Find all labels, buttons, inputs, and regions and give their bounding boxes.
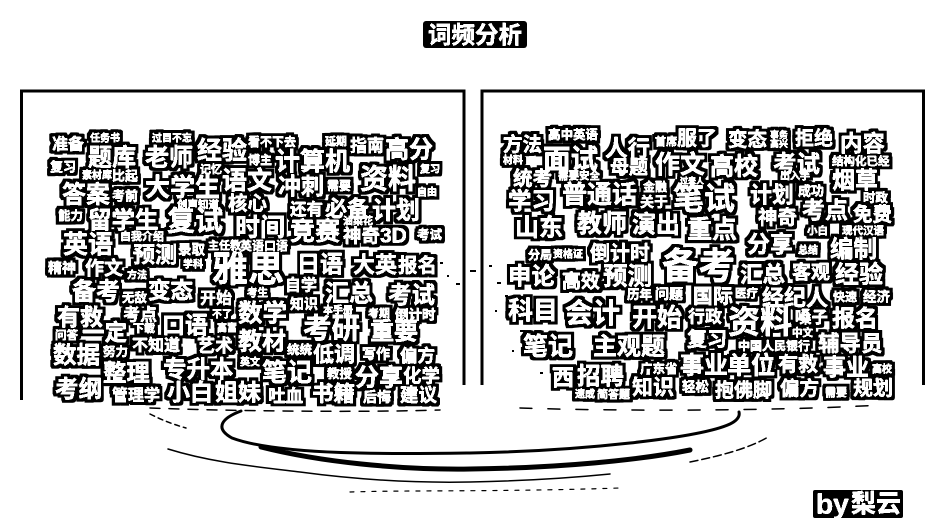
- word cloud: right panel: 资格证: [553, 248, 583, 260]
- word cloud: right panel: 抱佛脚: [715, 380, 772, 402]
- word cloud: left panel: 无敌: [122, 290, 148, 305]
- word cloud: left panel: 本手册: [323, 304, 353, 316]
- word cloud: left panel: 下载: [133, 321, 155, 335]
- word cloud: left panel: 冲刺: [278, 173, 324, 199]
- word cloud: right panel: 学习: [508, 188, 555, 214]
- word cloud: right panel: 小白: [807, 224, 828, 237]
- word cloud: left panel: 语文: [222, 167, 272, 195]
- word cloud: left panel: 看不下去: [248, 134, 296, 149]
- word cloud: right panel: 关于: [640, 194, 668, 210]
- word cloud: right panel: 招聘: [577, 363, 624, 389]
- word cloud: left panel: 数学: [238, 300, 287, 328]
- word cloud: left panel: 吐血: [268, 386, 303, 406]
- word cloud: left panel: 主任教: [208, 238, 241, 252]
- word cloud: left panel: 自由: [417, 186, 437, 198]
- word cloud: right panel: 客观: [792, 260, 830, 284]
- word cloud: left panel: 留学生: [88, 207, 158, 233]
- word cloud: left panel: 英语: [63, 231, 113, 259]
- word cloud: right panel: 预测: [603, 262, 652, 290]
- word cloud: left panel: 计划: [372, 198, 420, 224]
- word cloud: right panel: 重点: [687, 216, 737, 244]
- word cloud: left panel: 作文: [85, 256, 123, 280]
- word cloud: right panel: 医疗: [735, 286, 758, 300]
- word cloud: right panel: 历年: [627, 287, 652, 302]
- word cloud: left panel: 自学: [285, 276, 317, 294]
- word cloud: right panel: 母题: [610, 158, 648, 178]
- word cloud: right panel: 高兴: [770, 138, 788, 149]
- word cloud: right panel: 简答题: [597, 387, 630, 401]
- word cloud: left panel: 自我介绍: [120, 229, 164, 243]
- word cloud: right panel: 资料: [728, 304, 792, 340]
- word cloud: left panel: 知识: [290, 296, 318, 312]
- word cloud: right panel: 人行: [605, 136, 650, 162]
- word cloud: right panel: 申论: [508, 263, 556, 289]
- word cloud: right panel: 演出: [632, 212, 680, 238]
- word cloud: left panel: 有救: [57, 304, 103, 330]
- word cloud: right panel: 知识: [632, 376, 674, 400]
- word cloud: left panel: 艺术: [197, 336, 233, 356]
- word cloud: right panel: 编制: [830, 236, 877, 262]
- word cloud: right panel: 科目: [508, 297, 558, 325]
- word cloud: left panel: 专升本: [163, 356, 234, 382]
- word cloud: left panel: 努力: [103, 344, 128, 359]
- word cloud: right panel: 出入手: [780, 170, 810, 182]
- word cloud: left panel: 整理: [103, 360, 150, 386]
- word cloud: right panel: 时政: [863, 190, 889, 205]
- word cloud: right panel: 汇总: [740, 262, 785, 288]
- word cloud: left panel: 考试: [388, 282, 435, 308]
- word cloud: left panel: 问答: [55, 328, 78, 342]
- word cloud: right panel: 考试: [773, 151, 820, 177]
- word cloud: right panel: 偏方: [780, 377, 819, 400]
- word cloud: right panel: 事业: [680, 352, 728, 380]
- stage: elliptical platform rings: [150, 405, 880, 492]
- word cloud: left panel: 资料: [360, 164, 416, 194]
- word cloud: right panel: 现代汉语: [842, 224, 884, 237]
- word cloud: right panel: 作文: [655, 151, 705, 179]
- word cloud: left panel: 题库: [88, 144, 136, 172]
- word cloud: right panel: 国际: [693, 285, 733, 308]
- word cloud: left panel: 分享: [355, 364, 403, 392]
- word cloud: left panel: 报名: [398, 255, 437, 277]
- word cloud: left panel: 备考: [72, 278, 120, 306]
- word cloud: right panel: 中国人民银行: [738, 338, 810, 353]
- word cloud: left panel: 答案: [62, 182, 110, 208]
- word cloud: right panel: 复习: [687, 328, 727, 351]
- word cloud: left panel: 核心: [228, 192, 268, 215]
- word cloud: right panel: 免费: [853, 203, 892, 226]
- word cloud: right panel: 总结: [798, 244, 818, 256]
- word cloud: right panel: 广东省: [640, 361, 678, 376]
- word cloud: right panel: 笔记: [523, 333, 573, 361]
- word cloud: right panel: 拒绝: [795, 126, 833, 150]
- word cloud: right panel: 西: [552, 366, 574, 390]
- word cloud: left panel: 考研: [303, 313, 360, 345]
- word cloud: left panel: 必备: [325, 196, 369, 222]
- word cloud: right panel: 山东: [515, 214, 563, 242]
- word cloud: left panel: 开始: [200, 290, 232, 308]
- word cloud: left panel: 高分: [385, 136, 433, 164]
- word cloud: right panel: 考点: [802, 197, 848, 223]
- word cloud: left panel: 小白: [167, 379, 213, 405]
- word cloud: left panel: 学科: [183, 258, 203, 270]
- word cloud: right panel: 单位: [727, 352, 775, 380]
- word cloud: left panel: 录取: [178, 242, 205, 258]
- word cloud: left panel: 记忆: [200, 162, 222, 176]
- word cloud: right panel: 行政: [688, 308, 722, 326]
- word cloud: right panel: 金融: [643, 179, 667, 194]
- word cloud: left panel: 计算机: [275, 148, 350, 176]
- word cloud: left panel: 3D: [380, 224, 407, 248]
- word cloud: left panel: 考纲: [55, 376, 102, 402]
- word cloud: left panel: 油菜花: [343, 214, 373, 228]
- word cloud: right panel: 高中英语: [548, 127, 599, 142]
- word cloud: left panel: 创声知道: [177, 198, 219, 211]
- word cloud: left panel: 英语口语: [240, 238, 288, 253]
- word cloud: left panel: 经验: [197, 137, 247, 165]
- word cloud: left panel: 日语: [297, 251, 343, 277]
- word cloud: left panel: 预测: [133, 242, 177, 268]
- word cloud: right panel: 问题: [655, 286, 683, 302]
- word cloud: left panel: 统统: [287, 342, 313, 357]
- word cloud: right panel: 神奇: [758, 207, 797, 229]
- word cloud: left panel: 笔记: [262, 359, 312, 387]
- word cloud: left panel: 时间: [235, 214, 285, 242]
- word cloud: right panel: 有救: [778, 353, 818, 376]
- word cloud: right panel: 分局: [528, 248, 552, 262]
- word cloud: right panel: 开始: [632, 304, 682, 332]
- word cloud: left panel: 数据: [53, 342, 100, 368]
- word cloud: left panel: 重要: [370, 318, 418, 346]
- word cloud: right panel: 备考: [662, 246, 735, 286]
- word cloud: left panel: 偏方: [400, 346, 435, 366]
- word cloud: left panel: 汇总: [325, 280, 373, 308]
- word cloud: right panel: 主观题: [593, 334, 665, 360]
- word cloud: left panel: 书籍: [312, 382, 355, 406]
- signature: by 梨云: 梨云: [851, 490, 901, 518]
- word cloud: left panel: 考试: [417, 228, 443, 242]
- word cloud: right panel: 分享: [747, 231, 793, 257]
- word cloud: left panel: 化学: [403, 366, 440, 386]
- word cloud: right panel: 事务: [770, 129, 788, 140]
- signature: by 梨云: [813, 488, 903, 520]
- word cloud: right panel: 高校: [872, 362, 892, 376]
- word cloud: left panel: 大学生: [145, 174, 220, 202]
- word cloud: right panel: 经纪人: [762, 286, 828, 310]
- word cloud: right panel: 事业: [823, 354, 869, 380]
- word cloud: right panel: 需要安全: [558, 169, 600, 182]
- panel: right frame: [482, 91, 924, 385]
- word cloud: left panel: [48, 132, 443, 406]
- word cloud: right panel: 服了: [677, 128, 717, 150]
- word cloud: left panel: 指南: [350, 136, 384, 156]
- word cloud: right panel: 高校: [710, 154, 758, 180]
- word cloud: right panel: 需要: [825, 386, 847, 399]
- word cloud: left panel: 写作: [362, 346, 390, 362]
- word cloud: left panel: 复习: [420, 162, 440, 176]
- word cloud: left panel: 低调: [313, 344, 355, 366]
- word cloud: left panel: 雅思: [212, 248, 284, 290]
- word cloud: right panel: 统考: [513, 167, 552, 190]
- word cloud: right panel: 变态: [728, 128, 768, 151]
- word cloud: right panel: 内容: [840, 130, 885, 156]
- panel: left frame: [22, 91, 464, 400]
- word cloud: left panel: 比起: [112, 168, 138, 184]
- word cloud: right panel: 烟草: [832, 167, 878, 193]
- word cloud: right panel: 快速: [833, 289, 857, 304]
- word cloud: right panel: 辅导员: [818, 331, 883, 356]
- word cloud: left panel: 延期: [325, 134, 347, 148]
- word cloud: left panel: 姐妹: [215, 379, 261, 405]
- word cloud: left panel: 大英: [353, 252, 397, 278]
- signature: by 梨云: by: [816, 488, 849, 520]
- word cloud: right panel: 材料: [503, 154, 523, 166]
- word cloud: left panel: 精神: [48, 260, 76, 276]
- word cloud: right panel: 嗓子: [795, 308, 828, 327]
- word cloud: left panel: 能力: [58, 208, 83, 223]
- word cloud: left panel: 准备: [52, 134, 84, 154]
- word cloud: left panel: 老师: [145, 144, 193, 172]
- word cloud: right panel: 经验: [835, 260, 883, 288]
- word cloud: right panel: 过来人: [680, 176, 704, 186]
- word cloud: right panel: 报名: [832, 305, 878, 331]
- word cloud: left panel: 英文: [240, 356, 260, 368]
- word cloud: left panel: 变态: [148, 278, 193, 304]
- word cloud: left panel: 复试: [167, 206, 223, 236]
- word cloud: right panel: 中文: [792, 326, 813, 339]
- word cloud: left panel: 教材: [238, 328, 286, 356]
- word cloud: left panel: 博主: [248, 152, 272, 167]
- word cloud: right panel: [503, 126, 893, 402]
- word cloud: left panel: 教授: [327, 366, 353, 381]
- word cloud: right panel: 方法: [503, 133, 542, 156]
- word cloud: left panel: 一定: [82, 320, 127, 346]
- word cloud: left panel: 考生: [247, 286, 268, 299]
- word cloud: right panel: 笔试: [673, 182, 735, 216]
- word cloud: right panel: 轻松: [682, 378, 710, 394]
- word cloud: left panel: 过目不忘: [152, 132, 192, 144]
- title: 词频分析: [428, 22, 522, 48]
- word cloud: right panel: 会计: [565, 298, 620, 328]
- word cloud: left panel: 复习: [50, 160, 76, 174]
- word cloud: right panel: 结构化已经: [832, 154, 890, 168]
- word cloud: left panel: 竞赛: [290, 217, 340, 246]
- word cloud: right panel: 首席: [655, 134, 677, 148]
- word cloud: left panel: 神奇: [343, 226, 380, 246]
- word cloud: left panel: 不了: [212, 308, 232, 320]
- word cloud: left panel: 考前: [112, 188, 138, 204]
- word cloud: left panel: 方法: [127, 268, 147, 282]
- word cloud: left panel: 还有: [290, 200, 323, 219]
- word cloud: left panel: 建议: [400, 384, 438, 406]
- word cloud: left panel: 需要: [327, 179, 351, 193]
- word cloud: right panel: 规划: [853, 377, 893, 400]
- word cloud: right panel: 面试: [543, 144, 598, 174]
- word cloud: right panel: 经济: [863, 288, 890, 304]
- word cloud: left panel: 口语: [162, 312, 208, 338]
- word cloud: left panel: 倒计时: [395, 306, 436, 322]
- word cloud: right panel: 教师: [577, 210, 627, 238]
- word cloud: right panel: 速成: [575, 388, 595, 400]
- word cloud: right panel: 计划: [750, 182, 794, 208]
- word cloud: left panel: 后悔: [363, 389, 391, 405]
- word cloud: right panel: 倒计时: [590, 242, 650, 265]
- speckles between panels: [440, 262, 543, 374]
- word cloud: left panel: 任务书: [90, 132, 120, 144]
- word cloud: left panel: 管理学: [112, 386, 160, 404]
- word cloud: left panel: 高富: [217, 322, 237, 334]
- word cloud: right panel: 成功: [798, 184, 824, 198]
- word cloud: left panel: 考期: [368, 306, 390, 320]
- word cloud: left panel: 不知道: [132, 336, 180, 354]
- word cloud: left panel: 考点: [123, 306, 157, 324]
- word cloud: right panel: 普通话: [562, 181, 637, 209]
- word cloud: left panel: 素材库: [82, 168, 112, 182]
- word cloud: right panel: 高效: [562, 270, 600, 292]
